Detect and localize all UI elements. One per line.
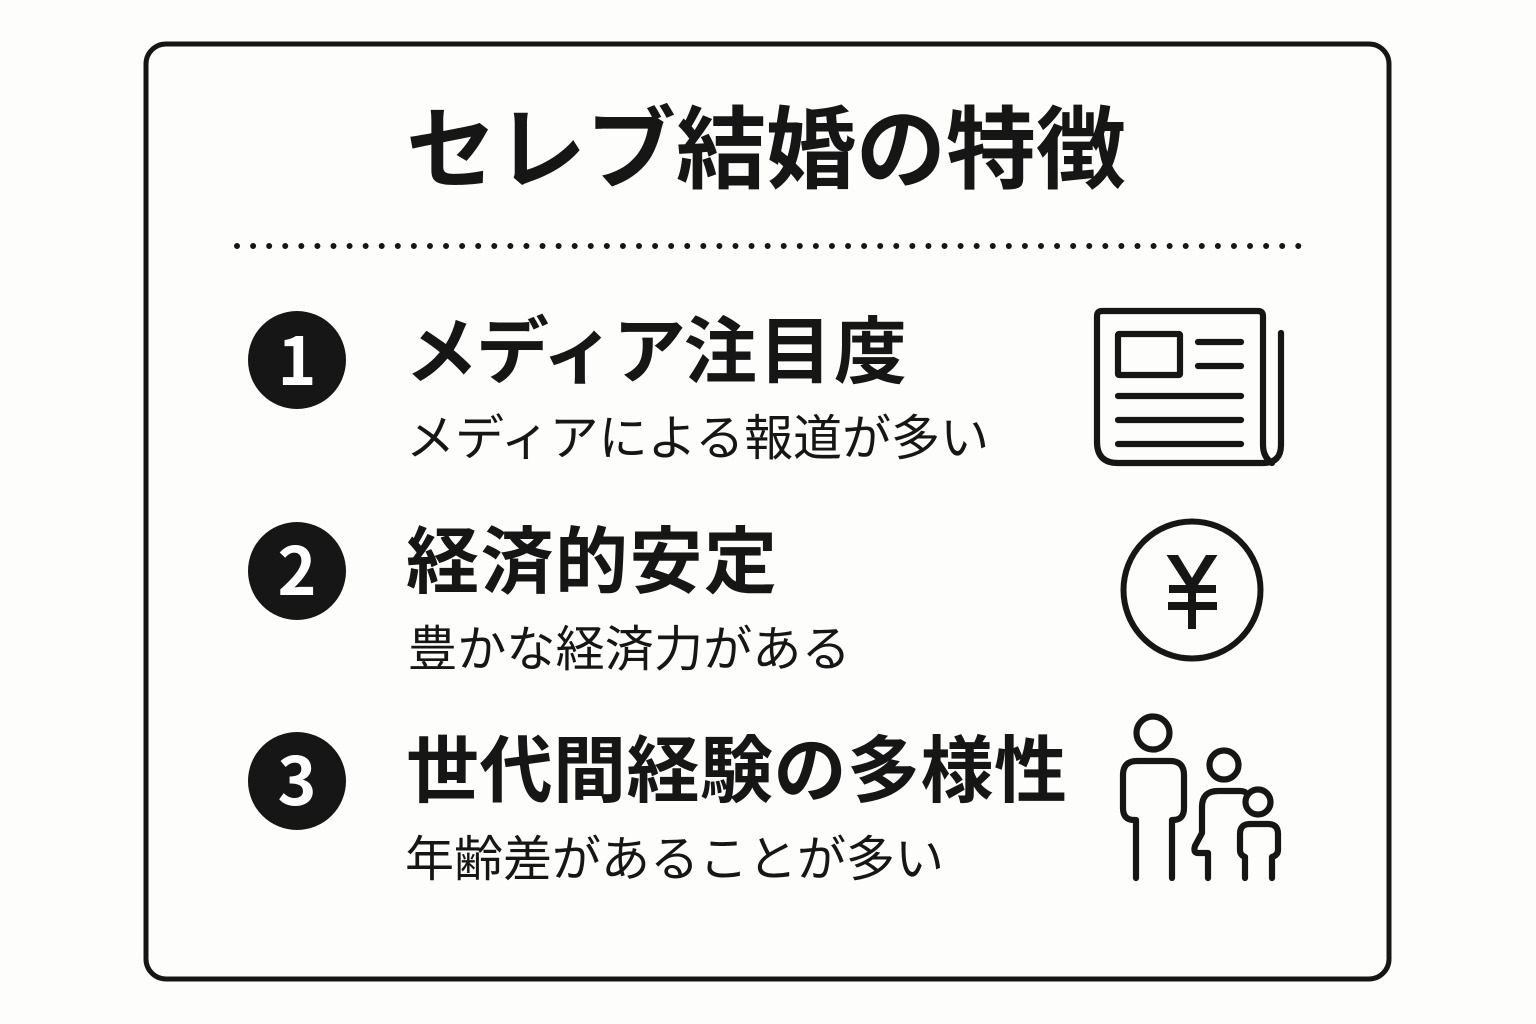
- title: セレブ結婚の特徴: [406, 101, 1126, 201]
- icon: family: [1123, 716, 1278, 878]
- panel: main card: [146, 44, 1389, 979]
- heading 1: メディア注目度: [405, 312, 909, 393]
- description 2: 豊かな経済力がある: [408, 623, 851, 677]
- number badge 1: 1: [278, 309, 316, 405]
- description 3: 年齢差があることが多い: [405, 833, 944, 887]
- icon: newspaper: [1097, 311, 1281, 463]
- item 2: financial stability: [248, 519, 1260, 677]
- number badge 3: 3: [278, 729, 316, 825]
- item 1: media attention: [248, 309, 1281, 466]
- item 3: generational diversity: [248, 716, 1278, 887]
- number badge 2: [248, 519, 346, 620]
- icon: yen coin: [1124, 522, 1260, 658]
- description 1: メディアによる報道が多い: [406, 412, 989, 466]
- number badge 1: [248, 309, 346, 409]
- number badge 2: 2: [278, 519, 316, 615]
- heading 3: 世代間経験の多様性: [406, 731, 1068, 812]
- heading 2: 経済的安定: [406, 522, 778, 603]
- number badge 3: [248, 729, 346, 830]
